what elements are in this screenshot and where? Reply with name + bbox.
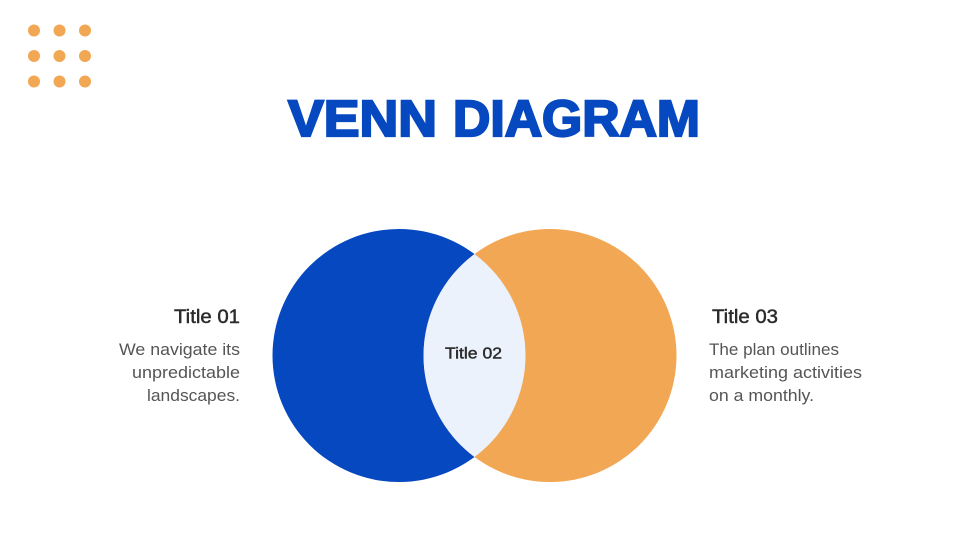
venn diagram — [272, 229, 676, 482]
body text: Title 01: landscapes. — [147, 386, 240, 405]
text block: Title 03 — [709, 307, 862, 405]
body text: Title 03: The plan outlines — [709, 340, 839, 359]
body text: Title 03: on a monthly. — [709, 386, 814, 405]
title: VENN — [288, 90, 437, 147]
body text: Title 03 — [709, 340, 862, 405]
text block: Title 01 — [119, 307, 240, 405]
left circle — [272, 229, 526, 482]
body text: Title 01: unpredictable — [132, 363, 240, 382]
overlap region — [423, 254, 526, 457]
title — [288, 90, 700, 147]
overlap label: Title 02: Title 02 — [445, 346, 502, 362]
body text: Title 01: We navigate its — [119, 340, 240, 359]
title: DIAGRAM — [453, 90, 700, 147]
right circle — [424, 229, 676, 482]
heading: Title 03: Title 03 — [712, 307, 778, 328]
body text: Title 01 — [119, 340, 240, 405]
icon: decorative dot grid — [28, 24, 91, 88]
heading: Title 01: Title 01 — [174, 307, 240, 328]
body text: Title 03: marketing activities — [709, 363, 862, 382]
